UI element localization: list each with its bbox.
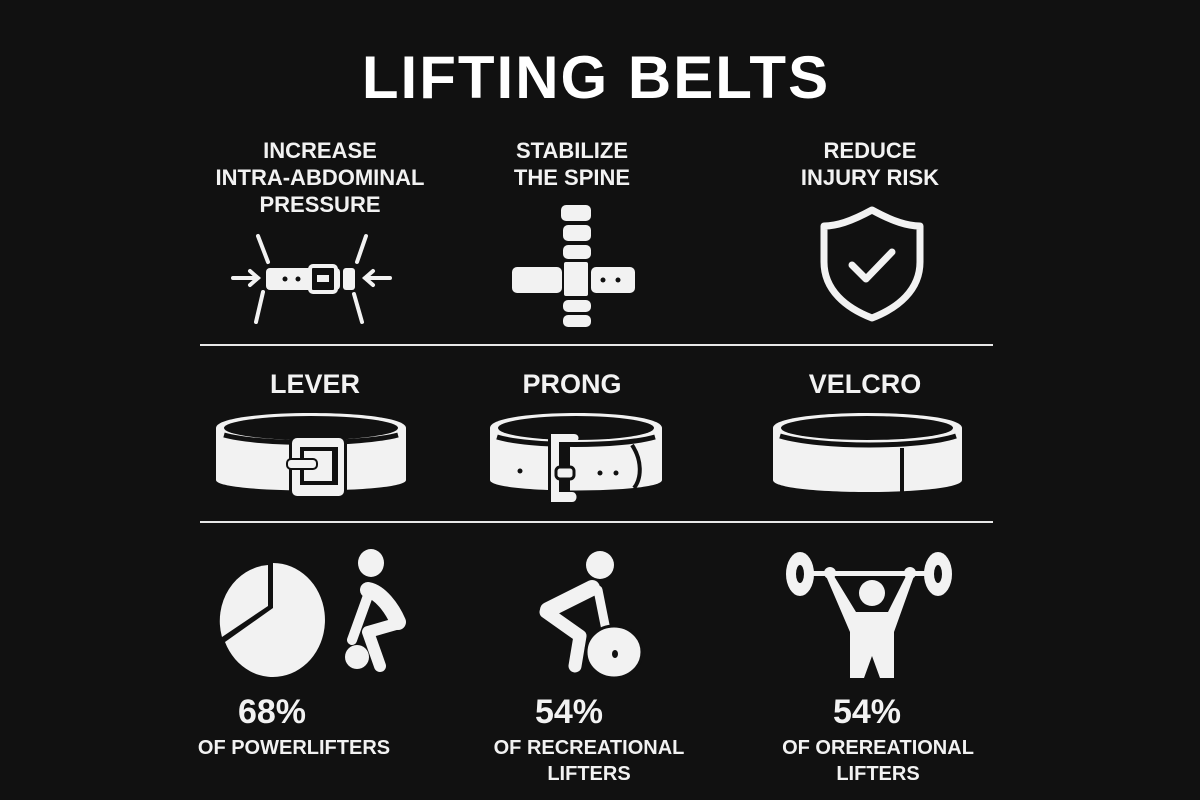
heading: increase pressure: INTRA-ABDOMINAL — [216, 165, 424, 190]
icon: overhead press figure — [786, 552, 952, 678]
icon: belt compression — [233, 236, 390, 322]
heading: stabilize: THE SPINE — [514, 165, 630, 190]
title: LIFTING BELTS — [362, 44, 830, 111]
heading: increase pressure — [216, 138, 424, 217]
stat: recreational: LIFTERS — [547, 763, 631, 785]
divider — [200, 521, 993, 523]
icon: lever belt — [216, 413, 406, 498]
icon: prong belt — [490, 413, 662, 504]
stat: recreational: 54% — [535, 693, 603, 731]
heading: reduce injury: INJURY RISK — [801, 165, 939, 190]
stat: orereational: LIFTERS — [836, 763, 920, 785]
heading: increase pressure: INCREASE — [263, 138, 377, 163]
icon: spine with belt — [512, 205, 635, 327]
stat: recreational — [494, 693, 684, 785]
stat: powerlifters: 68% — [238, 693, 306, 731]
stat: orereational: OF OREREATIONAL — [782, 737, 974, 759]
heading: increase pressure: PRESSURE — [259, 192, 381, 217]
divider — [200, 344, 993, 346]
heading: reduce injury: REDUCE — [824, 138, 916, 163]
stat: orereational: 54% — [833, 693, 901, 731]
stat: orereational — [782, 693, 974, 785]
heading: stabilize: STABILIZE — [516, 138, 628, 163]
icon: squat figure with ball — [345, 549, 398, 669]
heading: reduce injury — [801, 138, 939, 190]
label: velcro: VELCRO — [809, 369, 921, 399]
icon: deadlift figure — [546, 551, 642, 678]
label: prong: PRONG — [522, 369, 622, 399]
icon: pie chart — [220, 563, 325, 677]
stat: powerlifters: OF POWERLIFTERS — [198, 737, 390, 759]
heading: stabilize — [514, 138, 630, 190]
stat: powerlifters — [198, 693, 390, 759]
stat: recreational: OF RECREATIONAL — [494, 737, 684, 759]
label: lever: LEVER — [270, 369, 360, 399]
icon: velcro belt — [773, 413, 962, 494]
icon: shield check — [824, 210, 920, 318]
